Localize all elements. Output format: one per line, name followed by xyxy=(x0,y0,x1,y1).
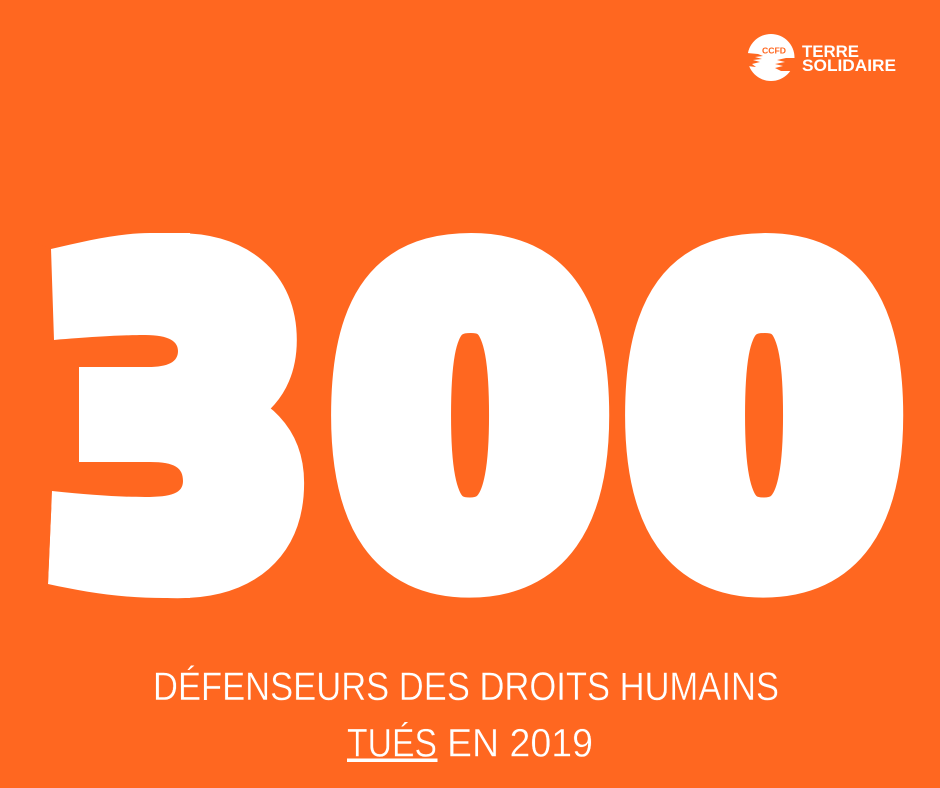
icon: hands circle xyxy=(747,34,795,81)
icon: hands circle: CCFD xyxy=(762,46,786,56)
big number: 300 xyxy=(30,168,894,661)
caption line 1: DÉFENSEURS DES DROITS HUMAINS xyxy=(153,664,779,709)
logo wordmark: TERRE xyxy=(802,42,859,61)
caption xyxy=(153,664,779,766)
logo wordmark xyxy=(802,42,896,75)
caption line 2: EN 2019 xyxy=(447,722,593,766)
big number: 300: 0 xyxy=(634,169,894,661)
caption line 2 xyxy=(347,720,593,766)
big number: 300: 0 xyxy=(340,169,600,661)
logo: CCFD Terre Solidaire xyxy=(747,34,896,81)
logo wordmark: SOLIDAIRE xyxy=(802,56,896,75)
caption line 2: TUÉS xyxy=(347,720,437,766)
big number: 300: 3 xyxy=(63,168,294,661)
underline xyxy=(347,758,438,762)
